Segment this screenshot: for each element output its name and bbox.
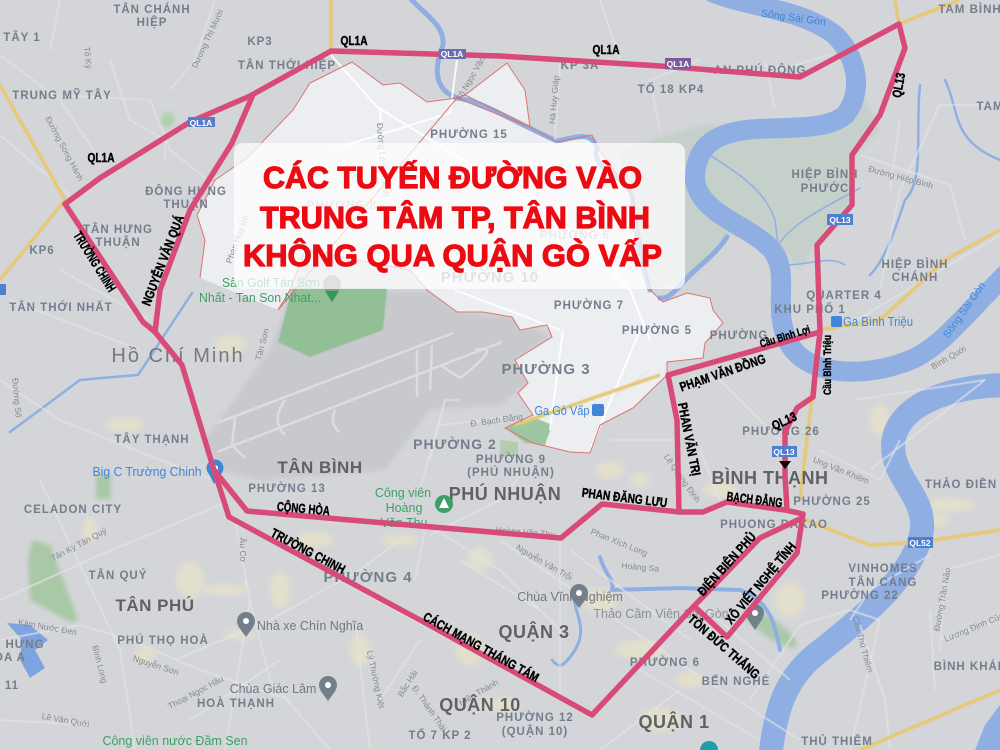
ward and neighbourhood labels: ĐÔNG HƯNG <box>145 185 227 198</box>
place labels green: Sân Golf Tân Sơn <box>222 276 320 290</box>
title panel <box>234 143 685 289</box>
black route labels: ĐIỆN BIÊN PHỦ <box>694 529 759 599</box>
road name labels: Dương Thị Mười <box>189 8 225 70</box>
Go Vap park <box>505 417 552 445</box>
route: Cong Hoa to Bach Dang <box>214 470 803 538</box>
place labels green <box>102 276 431 748</box>
place labels green: Văn Thụ <box>380 516 428 530</box>
black route labels: NGUYỄN VĂN QUÁ <box>139 212 187 308</box>
runways <box>217 333 502 458</box>
highway shields: QL1A <box>441 49 463 59</box>
place labels blue <box>92 8 988 479</box>
ward and neighbourhood labels: PHƯỜNG 5 <box>622 324 692 337</box>
title <box>243 159 662 273</box>
place labels grey: Thảo Cầm Viên Sài Gòn <box>593 607 729 621</box>
ward and neighbourhood labels: TAM BÌNH <box>938 3 1000 16</box>
ward and neighbourhood labels: HƯNG <box>5 639 45 651</box>
ward and neighbourhood labels: (PHÚ NHUẬN) <box>467 466 555 479</box>
road name labels: Lý Thường Kiệt <box>365 650 387 710</box>
black route labels: TRƯỜNG CHINH <box>268 525 348 577</box>
district labels <box>111 345 828 732</box>
place labels blue: Ga Bình Triệu <box>843 315 913 329</box>
ward and neighbourhood labels: HIỆP BÌNH <box>792 168 858 181</box>
highway shields: QL1A <box>667 59 689 69</box>
road name labels: Đường Hiệp Bình <box>867 164 934 191</box>
ward and neighbourhood labels: PHƯỚC <box>801 182 849 195</box>
ward and neighbourhood labels: HIỆP BÌNH <box>882 258 948 271</box>
place labels grey: Chùa Vĩnh Nghiệm <box>517 590 623 604</box>
district labels: QUẬN 3 <box>498 621 570 642</box>
road name labels: Hiền Thành <box>457 677 500 708</box>
ward and neighbourhood labels: PHƯỜNG 26 <box>742 425 820 438</box>
pink route lines <box>65 24 905 715</box>
ward and neighbourhood labels: TÂN THỚI NHẤT <box>9 301 113 314</box>
ward and neighbourhood labels: TÂY THẠNH <box>114 433 190 446</box>
ward and neighbourhood labels: KHU PHỐ 1 <box>774 302 846 316</box>
highway shields: QL13 <box>773 447 795 457</box>
Go Vap district area <box>197 62 723 453</box>
place labels blue: Sông Sài Gòn <box>760 8 827 29</box>
black route labels: Cầu Bình Triệu <box>822 335 834 395</box>
title: TRUNG TÂM TP, TÂN BÌNH <box>260 199 650 235</box>
black route labels: QL13 <box>769 409 799 433</box>
ward and neighbourhood labels: TỔ 18 KP4 <box>638 83 704 96</box>
district labels: BÌNH THẠNH <box>712 467 828 488</box>
road name labels: Tô Ngọc Vân <box>454 54 487 102</box>
highway shields <box>0 49 933 548</box>
district labels: TÂN PHÚ <box>115 596 195 615</box>
district labels: QUẬN 10 <box>439 694 521 715</box>
ward and neighbourhood labels: KP 3A <box>561 60 599 72</box>
road name labels: Phan Xích Long <box>589 526 649 558</box>
district labels: PHÚ NHUẬN <box>449 483 561 504</box>
place labels green: Công viên <box>375 486 431 500</box>
black route labels: CÁCH MẠNG THÁNG TÁM <box>421 609 542 685</box>
pin: park <box>435 495 453 513</box>
road name labels: Tân Kỳ Tân Quý <box>49 525 109 563</box>
Go Vap boundary <box>197 62 723 453</box>
ward and neighbourhood labels: TÂN QUÝ <box>89 569 147 582</box>
ward and neighbourhood labels: CHÁNH <box>892 271 938 284</box>
road name labels: Tân Sơn <box>253 327 271 361</box>
park Hoang Van Thu ward <box>500 440 518 456</box>
road name labels: Phan Huy Ích <box>224 213 251 265</box>
black route labels: Cầu Bình Lợi <box>759 324 812 350</box>
place labels blue: Sông Sài Gòn <box>941 280 988 341</box>
road name labels: Đ. Thành Thái <box>410 683 449 733</box>
road name labels: Âu Cơ <box>238 537 248 563</box>
ward and neighbourhood labels: PHƯỜNG 12 <box>496 711 574 724</box>
place labels green: Nhất - Tan Son Nhat... <box>199 291 321 305</box>
pin: Giac Lam <box>319 676 337 701</box>
ward and neighbourhood labels: BẾN NGHÉ <box>702 675 770 688</box>
road name labels: Đường Song Hành <box>43 115 86 183</box>
ward and neighbourhood labels: TÂN CHÁNH <box>113 3 191 16</box>
ward and neighbourhood labels: TÂN THỚI HIỆP <box>238 59 336 72</box>
ward and neighbourhood labels: PHƯỜNG 7 <box>554 299 624 312</box>
ward and neighbourhood labels: QUARTER 4 <box>806 290 882 302</box>
icon: Ga Go Vap <box>592 404 604 416</box>
road name labels: Hoàng Văn Thụ <box>495 524 556 540</box>
ward and neighbourhood labels: TỔ 7 KP 2 <box>408 729 472 742</box>
ward and neighbourhood labels: (QUẬN 10) <box>502 725 568 738</box>
ward and neighbourhood labels: PHƯỜNG 3 <box>501 360 591 378</box>
arrow: QL13 direction <box>779 461 791 469</box>
black route labels: QL13 <box>889 72 908 99</box>
ward and neighbourhood labels: HOÀ THẠNH <box>197 697 275 710</box>
district labels: TÂN BÌNH <box>277 458 363 477</box>
ward and neighbourhood labels: PHƯỜNG <box>710 329 768 342</box>
place labels green: Công viên nước Đầm Sen <box>102 734 248 748</box>
ward and neighbourhood labels: PHƯỜNG 9 <box>476 453 546 466</box>
road name labels: Đ. Bạch Đằng <box>470 411 524 429</box>
black route labels: PHAN ĐĂNG LƯU <box>581 485 668 510</box>
road name labels: Hà Huy Giáp <box>547 75 561 124</box>
road name labels: Nguyễn Văn Trỗi <box>515 542 575 583</box>
ward and neighbourhood labels: KP3 <box>247 36 273 48</box>
highway shields: QL13 <box>829 215 851 225</box>
black route labels: QL1A <box>592 42 620 57</box>
ward and neighbourhood labels: PHƯỜNG 4 <box>323 568 413 586</box>
pin: bus garage <box>237 612 255 637</box>
ward and neighbourhood labels: THUẬN <box>95 236 141 249</box>
black route labels: TRƯỜNG CHINH <box>70 229 119 294</box>
district labels: QUẬN 1 <box>638 711 710 732</box>
ward and neighbourhood labels: CELADON CITY <box>24 504 122 516</box>
place labels grey: Chùa Giác Lâm <box>230 682 316 696</box>
road name labels: Bình Quới <box>929 343 968 371</box>
place labels grey: Nhà xe Chín Nghĩa <box>257 619 363 633</box>
place labels grey <box>230 590 729 696</box>
ward and neighbourhood labels: PHÚ THỌ HOÀ <box>117 634 209 647</box>
black route labels: QL1A <box>88 150 115 165</box>
map pins <box>206 275 842 750</box>
black route labels: PHẠM VĂN ĐỒNG <box>678 351 768 394</box>
lake <box>7 623 48 678</box>
ward and neighbourhood labels: PHƯỜNG 2 <box>413 435 497 452</box>
ward and neighbourhood labels: TRUNG MỸ TÂY <box>12 89 112 102</box>
black route labels: QL1A <box>340 33 368 48</box>
title: CÁC TUYẾN ĐƯỜNG VÀO <box>263 159 642 195</box>
ward and neighbourhood labels: PHƯỜNG 6 <box>540 229 610 242</box>
ward and neighbourhood labels: TÂN CẢNG <box>849 576 917 589</box>
ward and neighbourhood labels: 11 <box>5 680 19 692</box>
route: Xo Viet Nghe Tinh and Ton Duc Thang <box>695 514 803 637</box>
ward and neighbourhood labels: HIỆP <box>137 16 167 29</box>
ward and neighbourhood labels: TÂY 1 <box>3 31 41 44</box>
black route labels: PHAN VĂN TRỊ <box>675 401 704 477</box>
road name labels: Đường Số <box>10 378 24 418</box>
road name labels: Thoại Ngọc Hầu <box>166 673 225 711</box>
ward and neighbourhood labels: AN PHÚ ĐÔNG <box>714 64 806 77</box>
place labels blue: Big C Trường Chinh <box>92 465 202 479</box>
black route labels: CỘNG HÒA <box>276 499 331 518</box>
road name labels: Lê Quang Định <box>662 452 703 505</box>
ward and neighbourhood labels: THẢO ĐIỀN <box>925 478 997 491</box>
ward and neighbourhood labels: PHƯỜNG 15 <box>430 128 508 141</box>
pin: Big C <box>206 460 224 484</box>
ward and neighbourhood labels: PHƯỜNG 25 <box>793 495 871 508</box>
road name labels: Kâm Nước Đen <box>17 617 78 637</box>
district labels: Hồ Chí Minh <box>111 345 245 367</box>
route: Nguyen Van Qua <box>155 97 252 332</box>
ward and neighbourhood labels: THỦ THIÊM <box>801 735 873 748</box>
road name labels: Nguyễn Sơn <box>132 653 180 677</box>
road name labels: Đường Trần Não <box>932 567 953 632</box>
golf course <box>278 288 387 357</box>
airport <box>205 290 552 480</box>
road name labels: Đường Lê Đức Anh <box>375 122 391 197</box>
place labels green: Hoàng <box>386 501 422 515</box>
road name labels: Lê Văn Quới <box>41 711 90 729</box>
black route labels <box>70 33 908 685</box>
road name labels: Hoàng Sa <box>621 560 660 574</box>
road name labels: Cầu Thủ Thiêm <box>851 615 875 674</box>
black route labels: TÔN ĐỨC THẮNG <box>685 611 763 682</box>
icon: Ga Binh Trieu <box>831 316 842 327</box>
road name labels: Ung Văn Khiêm <box>812 454 871 486</box>
ward and neighbourhood labels: PHƯỜNG 13 <box>248 482 326 495</box>
ward and neighbourhood labels: VINHOMES <box>848 563 918 575</box>
route: Pham Van Dong and Phan Van Tri <box>668 332 820 512</box>
Go Vap internal roads <box>330 55 650 450</box>
place labels blue: Ga Gò Vấp <box>534 404 590 418</box>
ward and neighbourhood labels: PHƯỜNG 10 <box>441 268 539 286</box>
ward and neighbourhood labels: PHƯỜNG 6 <box>630 656 700 669</box>
road name labels: Bình Long <box>90 644 110 684</box>
route: Truong Chinh north <box>65 204 802 715</box>
road name labels: Tô Ký <box>82 46 94 70</box>
pin: Quan 1 <box>700 741 718 750</box>
ward and neighbourhood labels: KP6 <box>29 245 55 257</box>
route: QL1A and QL13 <box>65 24 905 332</box>
highway shields: QL52 <box>909 538 931 548</box>
ward and neighbourhood labels: PHƯỜNG 22 <box>821 589 899 602</box>
ward and neighbourhood labels: TÂN HƯNG <box>83 223 153 236</box>
pin: zoo <box>746 604 764 630</box>
ward and neighbourhood labels: THUẬN <box>163 198 209 211</box>
road name labels: Bắc Hải <box>395 668 420 699</box>
title: KHÔNG QUA QUẬN GÒ VẤP <box>243 237 662 273</box>
black route labels: BẠCH ĐẰNG <box>726 489 783 510</box>
route: QL13 south <box>785 332 820 510</box>
ward and neighbourhood labels: PHƯỜNG 8 <box>307 199 377 212</box>
ward and neighbourhood labels: PHUONG DAKAO <box>720 519 828 531</box>
southeast water <box>975 705 1000 750</box>
highway shields: QL1A <box>190 118 212 128</box>
pin: Vinh Nghiem <box>570 584 588 608</box>
black route labels: XÔ VIẾT NGHỆ TĨNH <box>722 539 799 627</box>
pin: golf <box>323 275 341 302</box>
